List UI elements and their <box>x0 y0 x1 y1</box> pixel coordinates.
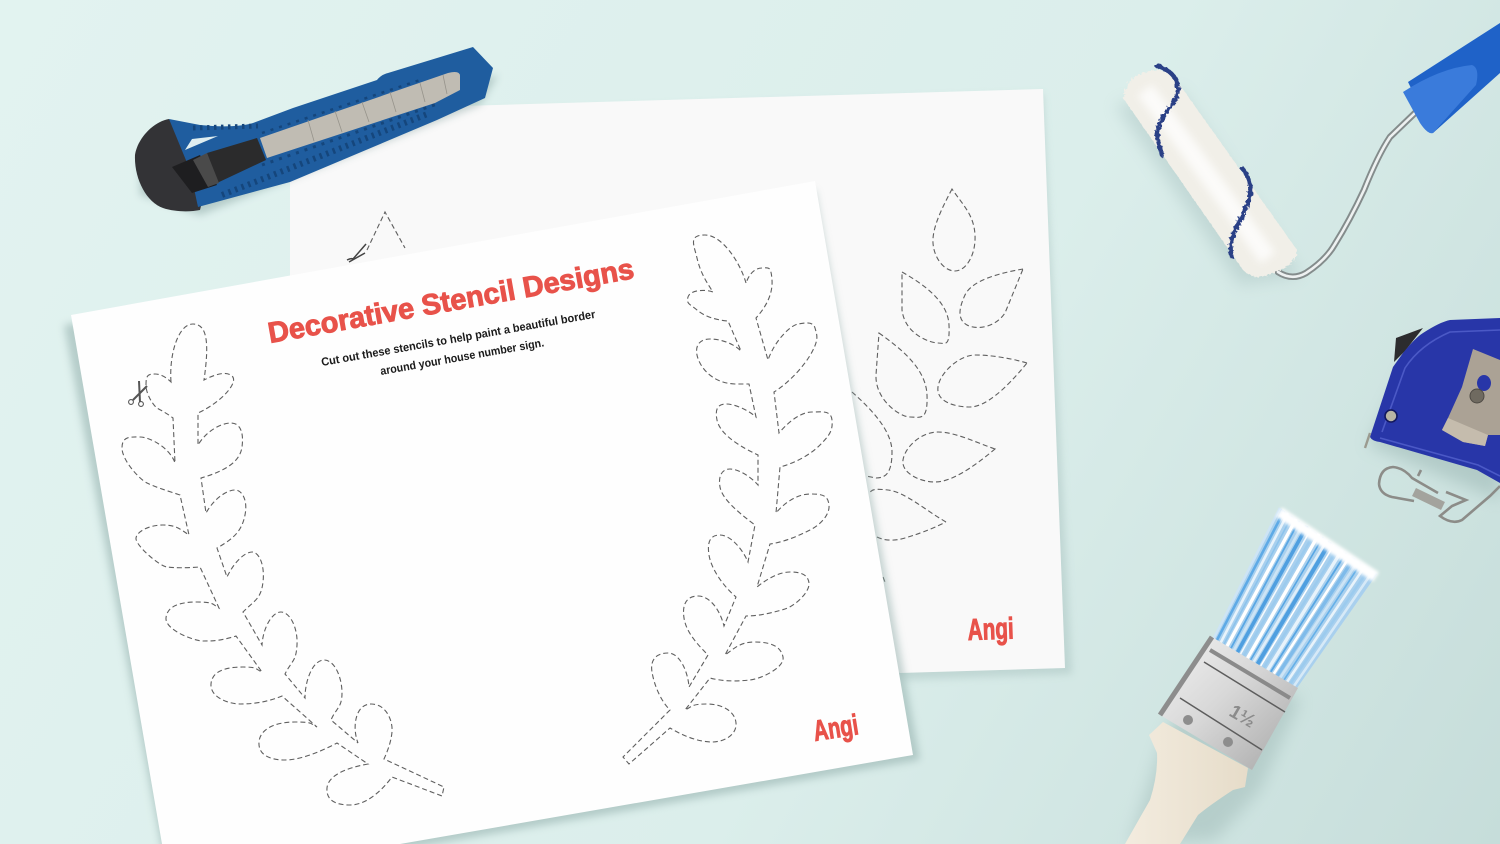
icon: back scissors <box>347 244 366 262</box>
back sheet leaf outlines <box>367 189 1027 582</box>
paper sheet: back stencil <box>286 89 1072 680</box>
icon: scissors <box>129 381 147 406</box>
tape measure <box>1365 318 1500 522</box>
body screw <box>1385 410 1397 422</box>
knife blue body <box>169 47 493 207</box>
front Angi logo: Angi <box>811 709 861 748</box>
subtitle: around your house number sign. <box>379 337 545 378</box>
blade <box>260 72 460 158</box>
back Angi logo: Angi <box>967 612 1014 647</box>
brush bristles <box>1213 508 1377 688</box>
tape tip <box>1365 433 1370 448</box>
clip hole <box>1477 375 1491 391</box>
subtitle: Cut out these stencils to help paint a beautiful border <box>320 309 597 369</box>
paint brush <box>1125 508 1377 844</box>
knife black end <box>135 119 205 211</box>
clip screw <box>1470 389 1484 403</box>
brush ferrule: 1½ <box>1226 701 1259 733</box>
knife grip ridges <box>193 80 440 195</box>
triangle cut-out <box>185 136 218 150</box>
knurled slider <box>207 138 266 183</box>
tape body <box>1370 318 1500 483</box>
paper sheet: front stencil <box>64 181 920 844</box>
left leaf stencil outline <box>122 324 444 805</box>
tape blade nub <box>1394 328 1423 362</box>
roller blue grip <box>1403 23 1500 133</box>
key ring clasp <box>1379 467 1500 522</box>
tape belt clip <box>1442 349 1500 446</box>
title: Decorative Stencil Designs <box>266 253 636 350</box>
right leaf stencil outline <box>623 235 832 764</box>
roller wire handle <box>1278 112 1416 277</box>
roller stripes <box>1157 66 1250 257</box>
roller sleeve <box>1123 70 1297 277</box>
utility knife <box>135 47 498 215</box>
brush ferrule <box>1160 637 1298 770</box>
paint roller <box>1115 23 1500 285</box>
brush wooden handle <box>1125 722 1248 844</box>
